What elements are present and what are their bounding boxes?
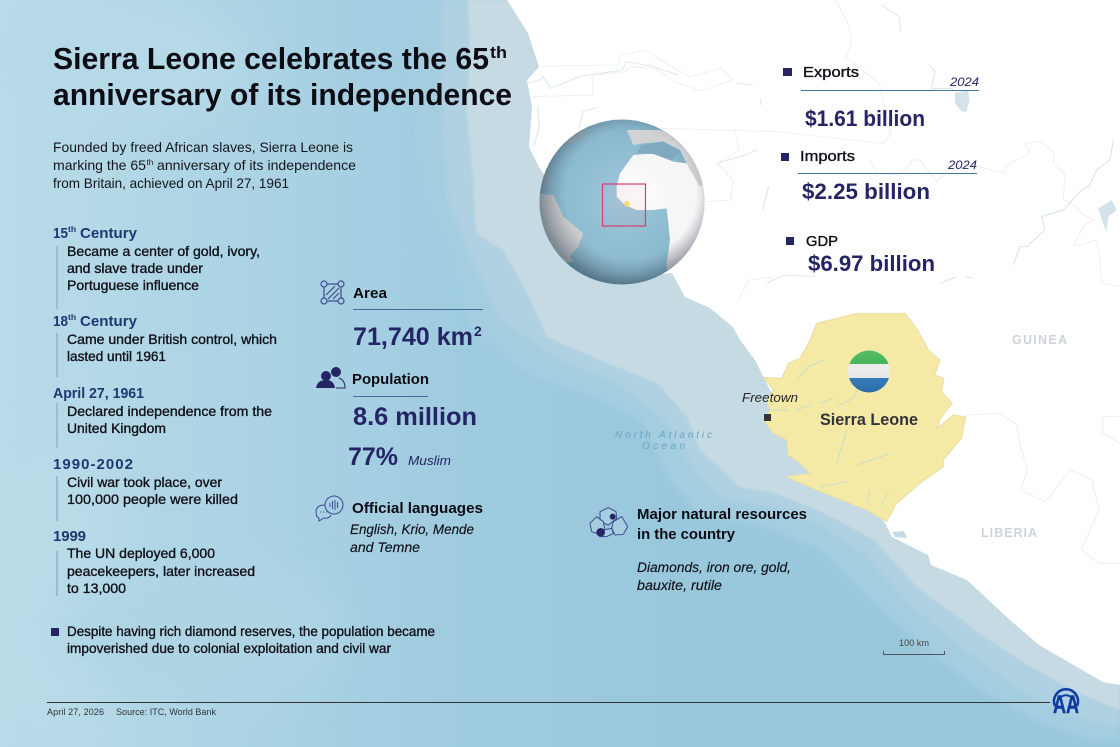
panel: natural resources: in the country bbox=[637, 526, 736, 543]
event: 18th century: Came under British control, which bbox=[67, 331, 277, 347]
event: 1990-2002: 100,000 people were killed bbox=[67, 491, 238, 507]
land mass bbox=[507, 0, 1120, 685]
panel: area bbox=[321, 281, 483, 351]
heading: title: th bbox=[490, 43, 507, 62]
panel: official languages: English, Krio, Mende bbox=[350, 522, 474, 537]
panel: population: Muslim bbox=[408, 453, 451, 468]
country polygon bbox=[763, 313, 966, 522]
event: April 27, 1961 bbox=[53, 385, 272, 448]
intro text: from Britain, achieved on April 27, 1961 bbox=[53, 175, 289, 191]
label: North Atlantic Ocean bbox=[615, 430, 712, 452]
event: April 27, 1961: Declared independence from the bbox=[67, 403, 272, 419]
panel: population bbox=[316, 367, 477, 471]
stat: GDP: $6.97 billion bbox=[808, 251, 935, 276]
event: 18th century bbox=[53, 312, 277, 377]
event: 1999: 1999 bbox=[53, 528, 86, 545]
panel: area: Area bbox=[353, 285, 388, 302]
globe ocean bbox=[540, 120, 704, 284]
note: diamond reserves: Despite having rich diamond reserves, the population became bbox=[67, 623, 435, 639]
event: 18th century: lasted until 1961 bbox=[67, 348, 166, 364]
locator box bbox=[602, 184, 646, 226]
borders south bbox=[967, 413, 1120, 563]
timeline bbox=[53, 224, 277, 596]
footer: Source: ITC, World Bank bbox=[116, 707, 216, 717]
event: 1999: to 13,000 bbox=[67, 580, 126, 596]
stat: imports: Imports bbox=[800, 149, 855, 165]
icon: speech bubbles bbox=[316, 496, 343, 521]
event: April 27, 1961: April 27, 1961 bbox=[53, 385, 144, 402]
icon: area bbox=[321, 281, 344, 304]
label: Sierra Leone: Sierra Leone bbox=[820, 410, 918, 429]
event: April 27, 1961: United Kingdom bbox=[67, 420, 166, 436]
event: 18th century: th bbox=[68, 312, 76, 322]
scale bar: 100 km bbox=[899, 638, 929, 648]
event: 1990-2002: 1990-2002 bbox=[53, 456, 133, 473]
panel: population: 77% bbox=[348, 443, 398, 471]
marker: Freetown bbox=[764, 414, 771, 421]
label: Freetown: Freetown bbox=[742, 390, 798, 405]
event: 18th century: Century bbox=[80, 313, 138, 330]
panel: official languages: Official languages bbox=[352, 500, 483, 517]
stat: GDP bbox=[786, 234, 935, 276]
footer: April 27, 2026 bbox=[47, 707, 104, 717]
event: 15th century: Became a center of gold, ivory, bbox=[67, 243, 260, 259]
stat: imports bbox=[781, 149, 977, 204]
globe shading bbox=[540, 120, 704, 284]
panel: area: 2 bbox=[474, 323, 482, 339]
panel: natural resources: Diamonds, iron ore, gold, bbox=[637, 560, 791, 575]
logo: AA bbox=[1053, 689, 1079, 719]
continental shelf: inner band bbox=[466, 0, 1120, 710]
event: 1999: The UN deployed 6,000 bbox=[67, 545, 215, 561]
event: 15th century bbox=[53, 224, 260, 309]
intro text bbox=[53, 139, 356, 191]
panel: area: 71,740 km bbox=[353, 323, 473, 351]
icon: minerals bbox=[590, 508, 628, 537]
note: diamond reserves bbox=[51, 623, 435, 656]
borders north bbox=[532, 0, 891, 303]
footer bbox=[47, 702, 1050, 717]
label: Guinea: GUINEA bbox=[1012, 333, 1067, 347]
borders east bbox=[870, 142, 1120, 287]
panel: official languages bbox=[316, 496, 483, 555]
event: 1999: peacekeepers, later increased bbox=[67, 563, 255, 579]
event: 18th century: 18 bbox=[53, 313, 68, 330]
label: North Atlantic Ocean: Ocean bbox=[642, 441, 685, 452]
small lagoon bbox=[892, 531, 907, 538]
scale bar bbox=[884, 638, 944, 654]
stat: GDP: GDP bbox=[806, 234, 838, 250]
panel: population: 8.6 million bbox=[353, 403, 477, 431]
icon: Sierra Leone flag bbox=[848, 350, 890, 393]
note: diamond reserves: impoverished due to colonial exploitation and civil war bbox=[67, 640, 391, 656]
logo: AA: AA bbox=[1053, 691, 1079, 719]
sea light patches bbox=[5, 5, 340, 740]
globe locator bbox=[540, 120, 704, 284]
panel: natural resources bbox=[590, 506, 807, 593]
panel: natural resources: bauxite, rutile bbox=[637, 578, 722, 593]
intro text: marking the 65 bbox=[53, 157, 146, 173]
event: 1990-2002: Civil war took place, over bbox=[67, 474, 222, 490]
panel: natural resources: Major natural resources bbox=[637, 506, 807, 523]
continental shelf: middle band bbox=[440, 0, 1120, 728]
stat: imports: $2.25 billion bbox=[802, 179, 930, 204]
rivers east bbox=[930, 65, 1113, 283]
event: 15th century: Century bbox=[80, 225, 138, 242]
panel: population: Population bbox=[352, 371, 429, 388]
event: 15th century: Portuguese influence bbox=[67, 277, 199, 293]
event: 15th century: th bbox=[68, 224, 76, 234]
Sierra Leone marker bbox=[624, 201, 630, 207]
event: 15th century: and slave trade under bbox=[67, 260, 203, 276]
land: West Africa base map bbox=[507, 0, 1120, 685]
event: 1999 bbox=[53, 528, 255, 596]
heading: title: anniversary of its independence bbox=[53, 77, 512, 112]
event: 15th century: 15 bbox=[53, 225, 68, 242]
panel: official languages: and Temne bbox=[350, 540, 420, 555]
icon: people bbox=[316, 367, 345, 388]
intro text: anniversary of its independence bbox=[157, 157, 356, 173]
event: 1990-2002 bbox=[53, 456, 238, 521]
continental shelf: outer band bbox=[410, 0, 1120, 740]
stat: exports: 2024 bbox=[949, 75, 979, 89]
country rivers bbox=[770, 360, 888, 505]
label: North Atlantic Ocean: North Atlantic bbox=[615, 430, 712, 441]
globe land bbox=[540, 130, 704, 271]
heading: title: Sierra Leone celebrates the 65 bbox=[53, 41, 489, 76]
intro text: th bbox=[146, 158, 153, 167]
stat: imports: 2024 bbox=[947, 158, 977, 172]
intro text: Founded by freed African slaves, Sierra Leone is bbox=[53, 139, 353, 155]
Sierra Leone shape bbox=[763, 313, 966, 522]
stat: exports bbox=[783, 65, 979, 131]
label: Liberia: LIBERIA bbox=[981, 526, 1037, 540]
lakes bbox=[955, 91, 1117, 232]
stat: exports: Exports bbox=[803, 65, 859, 81]
heading: title bbox=[53, 41, 512, 112]
stat: exports: $1.61 billion bbox=[805, 106, 925, 131]
rivers north bbox=[528, 5, 901, 283]
